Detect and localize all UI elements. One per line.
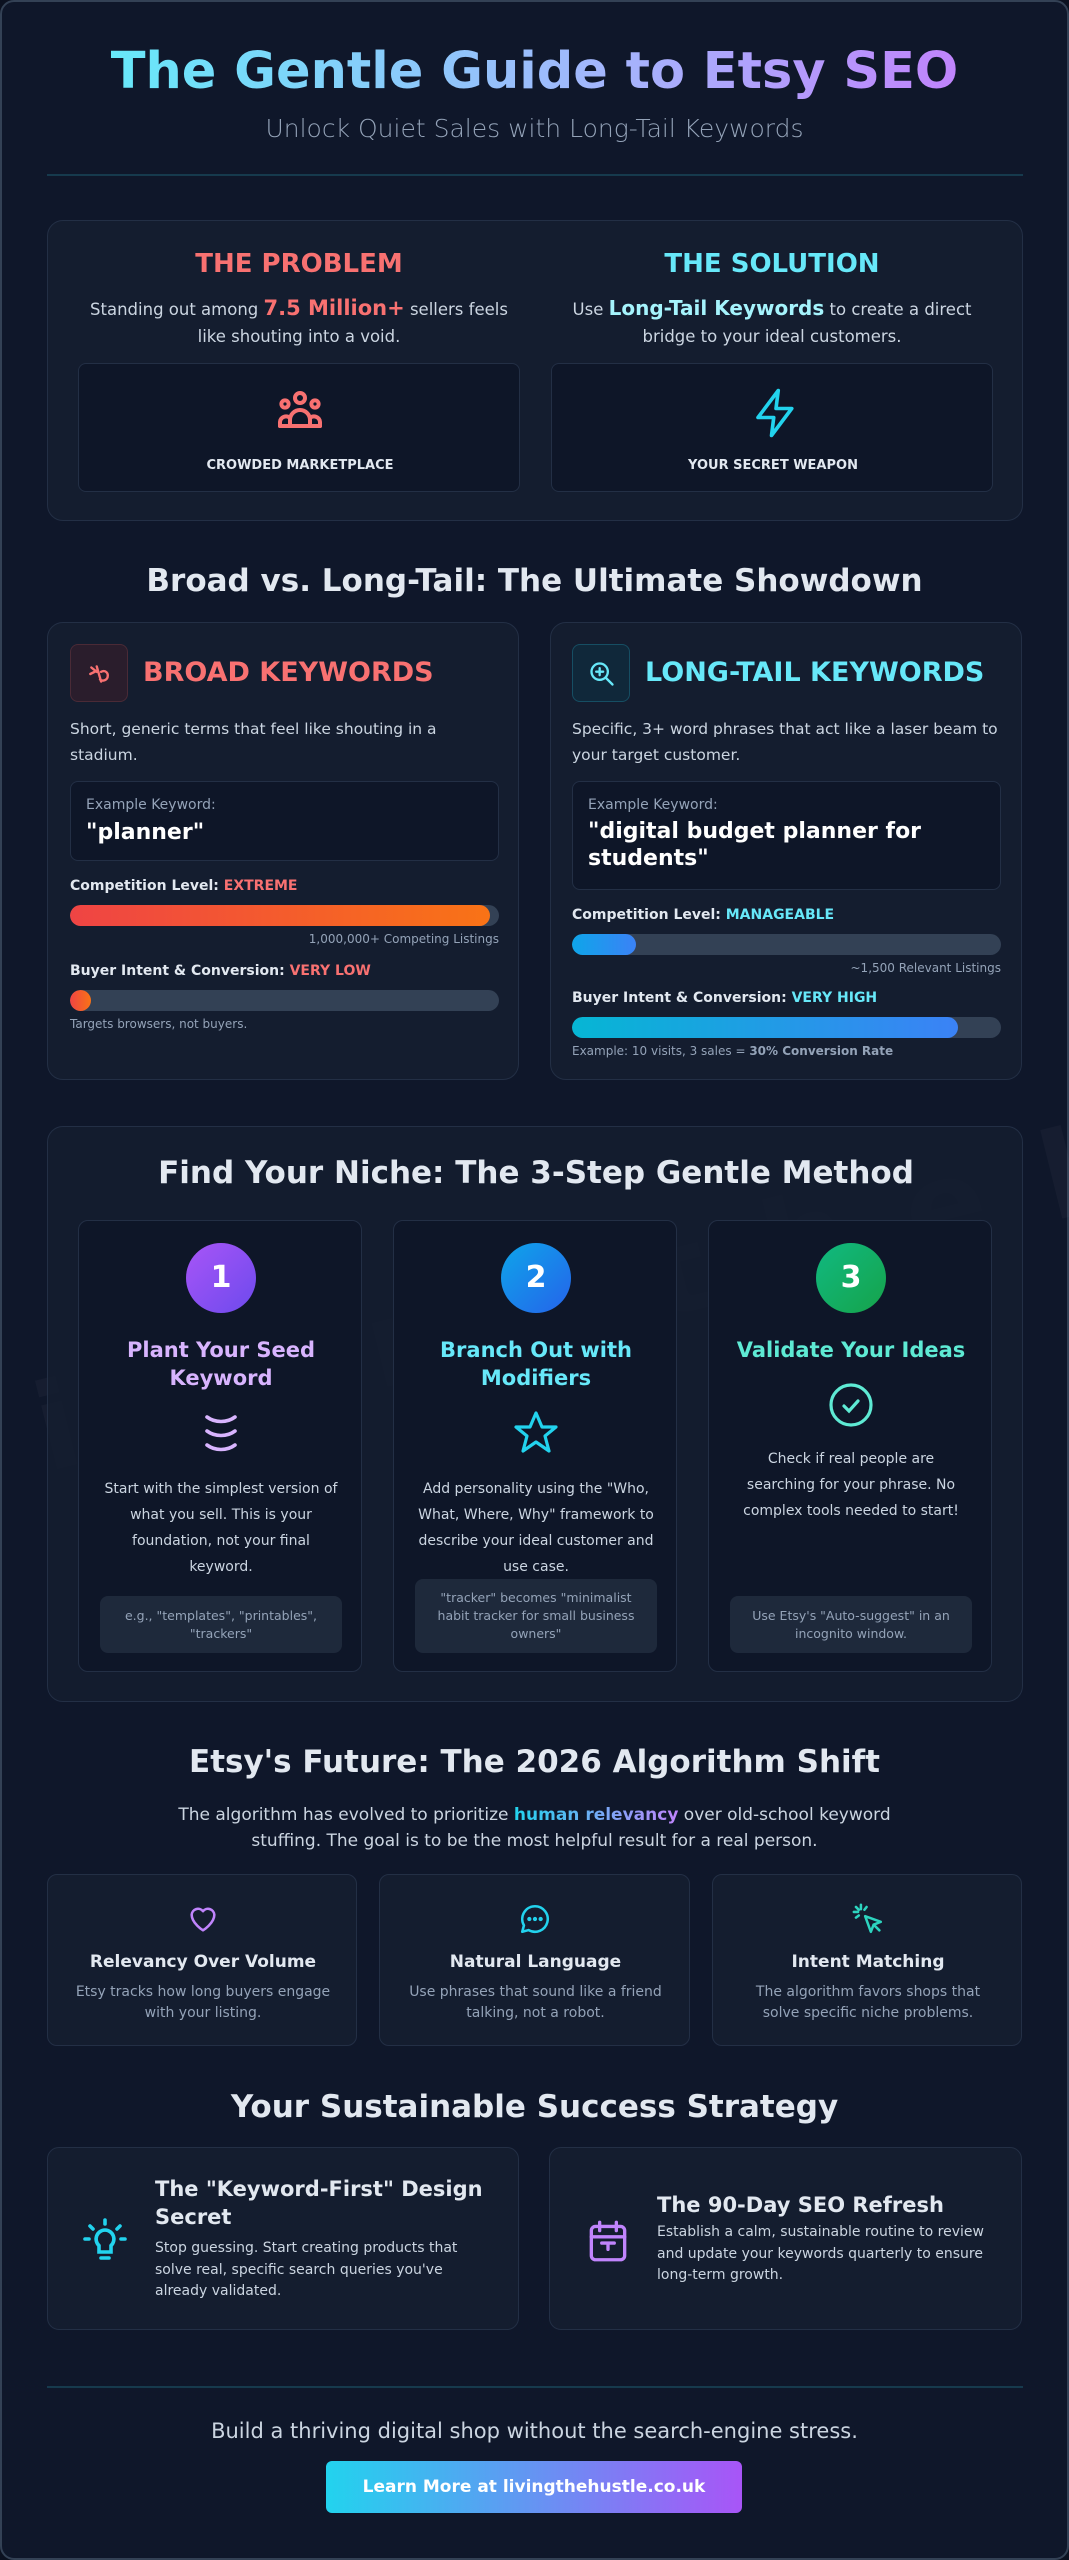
note: Use Etsy's "Auto-suggest" in an incognito window. [752, 1608, 950, 1640]
text: algorithm intro: The algorithm has evolved to prioritize human relevancy over old-school keyword stuffing. The goal is to be the most helpful result for a real person. [178, 1805, 891, 1851]
button: Learn More at livingthehustle.co.uk [363, 2477, 705, 2497]
desc: Use phrases that sound like a friend talking, not a robot. [409, 1984, 662, 2021]
card: relevancy over volume [47, 1874, 357, 2046]
card: intent matching [712, 1874, 1022, 2046]
competition meter [572, 907, 1001, 975]
desc: Stop guessing. Start creating products that solve real, specific search queries you've already validated. [155, 2240, 457, 2299]
desc: The algorithm favors shops that solve specific niche problems. [756, 1984, 980, 2021]
icon: broad [70, 644, 128, 702]
note: "tracker" becomes "minimalist habit tracker for small business owners" [438, 1590, 634, 1641]
card: 90-day refresh [549, 2147, 1022, 2330]
label: CROWDED MARKETPLACE [206, 458, 394, 473]
heading: Find Your Niche: The 3-Step Gentle Method [158, 1155, 914, 1191]
desc: Etsy tracks how long buyers engage with your listing. [76, 1984, 330, 2021]
step title: Plant Your Seed Keyword [127, 1338, 315, 1390]
description: Specific, 3+ word phrases that act like a laser beam to your target customer. [572, 720, 998, 764]
icon: heart [190, 1908, 216, 1932]
step 1 [78, 1220, 362, 1672]
box: secret weapon [551, 363, 993, 492]
example box: "digital budget planner for students" [588, 819, 921, 871]
example box [70, 781, 499, 861]
heading: the solution: THE SOLUTION [664, 249, 880, 279]
competition meter: Competition Level: MANAGEABLE [572, 907, 834, 923]
example box: Example Keyword: [86, 797, 216, 813]
label: YOUR SECRET WEAPON [688, 458, 858, 473]
competition meter: ~1,500 Relevant Listings [850, 961, 1001, 975]
step title: Validate Your Ideas [737, 1338, 965, 1362]
icon: check circle [829, 1383, 873, 1427]
icon: star [514, 1411, 558, 1453]
icon: lightbulb [83, 2218, 127, 2260]
icon: people [278, 391, 322, 428]
note [100, 1596, 342, 1653]
subtitle: Unlock Quiet Sales with Long-Tail Keywords [265, 114, 804, 143]
heading: LONG-TAIL KEYWORDS [645, 657, 984, 688]
note: e.g., "templates", "printables", "trackers" [125, 1608, 317, 1640]
title: The Gentle Guide to Etsy SEO [111, 42, 958, 101]
heading: the problem: THE PROBLEM [195, 249, 403, 279]
icon: calendar [590, 2220, 626, 2262]
card: keyword-first design [47, 2147, 519, 2330]
card: natural language [379, 1874, 690, 2046]
buyer intent meter: Buyer Intent & Conversion: VERY LOW [70, 963, 371, 979]
title: Relevancy Over Volume [90, 1952, 316, 1972]
heading: showdown: Broad vs. Long-Tail: The Ultimate Showdown [146, 563, 923, 599]
button [326, 2461, 742, 2513]
icon: lightning [756, 388, 794, 438]
title: Intent Matching [791, 1952, 945, 1972]
number circle [186, 1243, 256, 1313]
competition meter [70, 878, 499, 946]
title: Natural Language [450, 1952, 621, 1972]
heading: BROAD KEYWORDS [143, 657, 434, 688]
buyer intent meter: Example: 10 visits, 3 sales = 30% Conversion Rate [572, 1044, 893, 1058]
description: Short, generic terms that feel like shouting in a stadium. [70, 720, 437, 764]
step text: Start with the simplest version of what you sell. This is your foundation, not your final keyword. [105, 1481, 337, 1575]
step 2 [393, 1220, 677, 1672]
panel: long-tail keywords [550, 622, 1022, 1080]
step title: Branch Out with Modifiers [440, 1338, 632, 1390]
step text: Check if real people are searching for your phrase. No complex tools needed to start! [743, 1451, 959, 1519]
note [730, 1596, 972, 1653]
number circle: 1 [211, 1260, 231, 1295]
number circle [501, 1243, 571, 1313]
number circle: 3 [841, 1260, 861, 1295]
number circle: 2 [526, 1260, 546, 1295]
buyer intent meter [70, 963, 499, 1031]
panel: problem and solution [47, 220, 1023, 521]
panel: 3-step method [47, 1126, 1023, 1702]
text: solution: Use Long-Tail Keywords to create a direct bridge to your ideal customers. [573, 296, 971, 346]
competition meter: 1,000,000+ Competing Listings [309, 932, 499, 946]
step 3 [708, 1220, 992, 1672]
icon: chevrons [205, 1415, 237, 1452]
panel: broad keywords [47, 622, 519, 1080]
buyer intent meter: Targets browsers, not buyers. [70, 1017, 247, 1031]
example box [572, 781, 1001, 890]
example box: Example Keyword: [588, 797, 718, 813]
box: crowded marketplace [78, 363, 520, 492]
icon: search [572, 644, 630, 702]
buyer intent meter [572, 990, 1001, 1058]
example box: "planner" [86, 820, 204, 845]
title: The 90-Day SEO Refresh [657, 2193, 944, 2217]
step text: Add personality using the "Who, What, Where, Why" framework to describe your ideal customer and use case. [418, 1481, 654, 1575]
heading: success strategy: Your Sustainable Success Strategy [231, 2089, 838, 2125]
title: The "Keyword-First" Design Secret [155, 2177, 483, 2229]
heading: algorithm shift: Etsy's Future: The 2026 Algorithm Shift [189, 1744, 880, 1780]
icon: pointer click [852, 1904, 882, 1934]
note [415, 1579, 657, 1653]
icon: chat [521, 1905, 550, 1934]
competition meter: Competition Level: EXTREME [70, 878, 298, 894]
number circle [816, 1243, 886, 1313]
buyer intent meter: Buyer Intent & Conversion: VERY HIGH [572, 990, 877, 1006]
text: problem: Standing out among 7.5 Million+ sellers feels like shouting into a void. [90, 296, 508, 346]
desc: Establish a calm, sustainable routine to review and update your keywords quarterly to ensure long-term growth. [657, 2224, 984, 2283]
footer text: Build a thriving digital shop without the search-engine stress. [211, 2419, 858, 2443]
